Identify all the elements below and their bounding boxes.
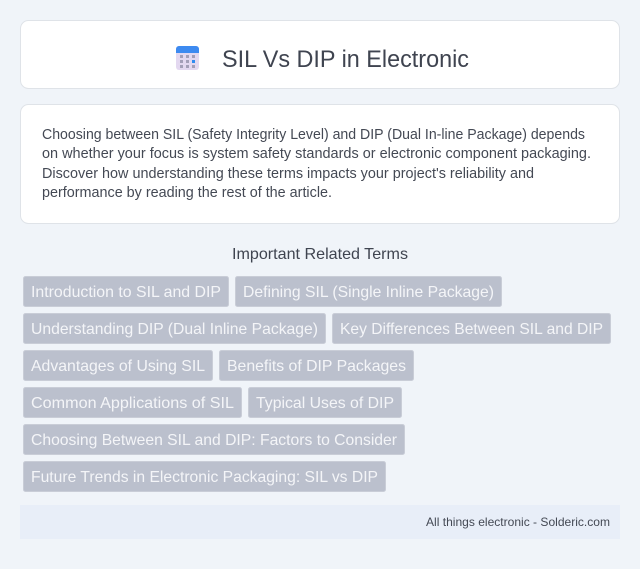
tag bbox=[24, 462, 386, 492]
panel: title card bbox=[20, 20, 620, 88]
tag bbox=[24, 388, 242, 418]
tag: Benefits of DIP Packages bbox=[227, 358, 406, 375]
intro paragraph: performance by reading the rest of the article. bbox=[42, 185, 332, 201]
tag list bbox=[24, 276, 610, 492]
tag bbox=[24, 314, 326, 344]
tag: Key Differences Between SIL and DIP bbox=[340, 321, 603, 338]
intro paragraph: Discover how understanding these terms impacts your project's reliability and bbox=[42, 166, 534, 182]
tag bbox=[332, 314, 610, 344]
tag: Common Applications of SIL bbox=[31, 395, 234, 412]
tag: Choosing Between SIL and DIP: Factors to Consider bbox=[31, 432, 398, 449]
intro paragraph: Choosing between SIL (Safety Integrity Level) and DIP (Dual In-line Package) depends bbox=[42, 127, 585, 143]
tag bbox=[236, 276, 502, 306]
title: SIL Vs DIP in Electronic bbox=[222, 46, 469, 73]
tag bbox=[24, 276, 228, 306]
icon: calendar bbox=[176, 46, 199, 70]
footer bbox=[20, 505, 620, 539]
tag: Understanding DIP (Dual Inline Package) bbox=[31, 321, 318, 338]
tag bbox=[24, 424, 404, 454]
heading: related terms: Important Related Terms bbox=[232, 246, 408, 263]
tag bbox=[248, 388, 402, 418]
tag: Typical Uses of DIP bbox=[256, 395, 394, 412]
tag: Future Trends in Electronic Packaging: SIL vs DIP bbox=[31, 469, 378, 486]
panel: introduction bbox=[20, 104, 620, 224]
tag: Advantages of Using SIL bbox=[31, 358, 205, 375]
footer credit: All things electronic - Solderic.com bbox=[426, 515, 610, 529]
tag: Introduction to SIL and DIP bbox=[31, 284, 221, 301]
tag bbox=[24, 350, 212, 380]
intro paragraph: on whether your focus is system safety standards or electronic component packaging. bbox=[42, 146, 591, 162]
tag bbox=[220, 350, 414, 380]
tag: Defining SIL (Single Inline Package) bbox=[243, 284, 494, 301]
intro paragraph bbox=[42, 127, 591, 201]
